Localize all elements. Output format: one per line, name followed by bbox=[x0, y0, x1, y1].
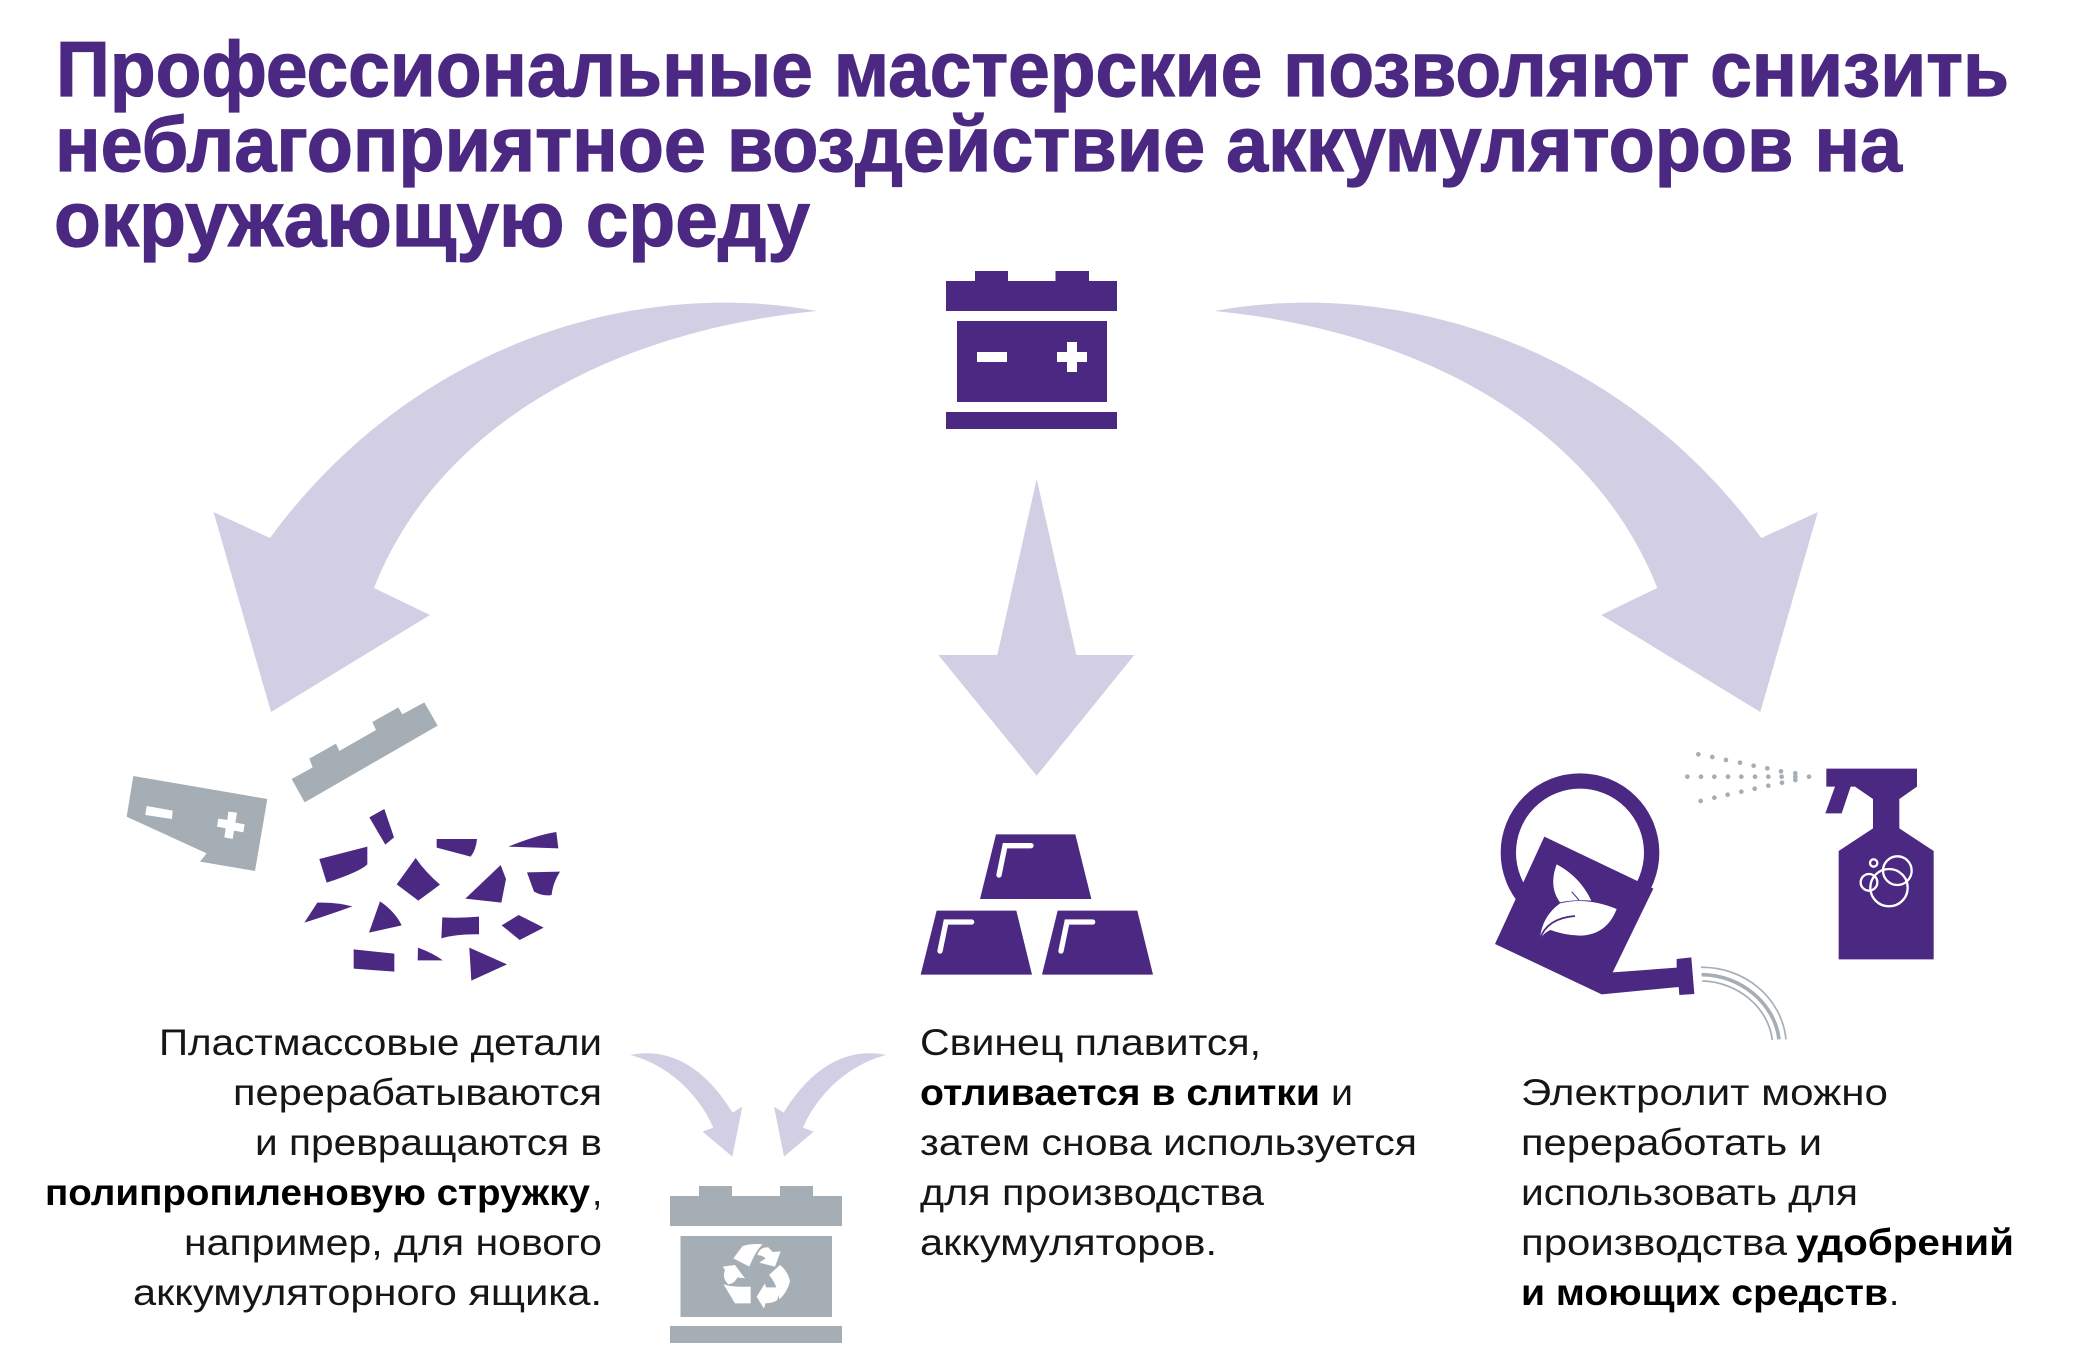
icon: grey recycled battery bbox=[670, 1186, 842, 1343]
text: lead: отливается в слитки bbox=[920, 1072, 1320, 1113]
icon: spray bottle with bubbles bbox=[1825, 769, 1934, 959]
icon: purple battery bbox=[946, 271, 1117, 429]
icon: broken battery casing and plastic fragments bbox=[127, 702, 560, 981]
text: lead: Свинец плавится, bbox=[920, 1022, 1261, 1063]
text: electrolyte: и моющих средств bbox=[1521, 1272, 1888, 1313]
text: electrolyte: Электролит можно bbox=[1521, 1072, 1888, 1113]
title: окружающую среду bbox=[54, 175, 810, 263]
recycling symbol bbox=[723, 1244, 790, 1309]
text: lead: для производства bbox=[920, 1172, 1264, 1213]
text: plastic parts: например, для нового bbox=[184, 1222, 602, 1263]
arrows: into recycled battery bbox=[630, 1053, 886, 1157]
arrow: battery to electrolyte products bbox=[1214, 303, 1818, 712]
text: electrolyte: переработать и bbox=[1521, 1122, 1822, 1163]
text: electrolyte bbox=[1521, 1072, 2014, 1313]
text: lead: аккумуляторов. bbox=[920, 1222, 1217, 1263]
text: electrolyte: . bbox=[1889, 1272, 1899, 1313]
text: lead bbox=[920, 1022, 1417, 1263]
icon: water stream bbox=[1701, 967, 1786, 1040]
text: lead: затем снова используется bbox=[920, 1122, 1417, 1163]
icon: lead ingots bbox=[921, 834, 1153, 975]
purple plastic chips bbox=[304, 809, 560, 981]
text: electrolyte: производства bbox=[1521, 1222, 1787, 1263]
text: plastic parts: , bbox=[592, 1172, 602, 1213]
text: plastic parts bbox=[45, 1022, 602, 1313]
text: plastic parts: Пластмассовые детали bbox=[159, 1022, 602, 1063]
text: plastic parts: перерабатываются bbox=[233, 1072, 602, 1113]
icon: spray mist dots bbox=[1685, 752, 1811, 803]
icon: watering can with leaf bbox=[1495, 781, 1694, 995]
text: lead: и bbox=[1331, 1072, 1353, 1113]
text: electrolyte: удобрений bbox=[1796, 1222, 2014, 1263]
grey battery body piece bbox=[127, 776, 267, 871]
grey battery lid piece bbox=[292, 702, 438, 802]
text: electrolyte: использовать для bbox=[1521, 1172, 1858, 1213]
title: неблагоприятное воздействие аккумуляторов на bbox=[55, 100, 1903, 188]
text: plastic parts: и превращаются в bbox=[255, 1122, 602, 1163]
arrow: battery to lead ingots bbox=[938, 479, 1134, 776]
text: plastic parts: полипропиленовую стружку bbox=[45, 1172, 590, 1213]
arrow: battery to plastic parts bbox=[214, 303, 817, 712]
title: Профессиональные мастерские позволяют снизить bbox=[56, 25, 2009, 113]
title bbox=[54, 25, 2009, 263]
text: plastic parts: аккумуляторного ящика. bbox=[133, 1272, 602, 1313]
